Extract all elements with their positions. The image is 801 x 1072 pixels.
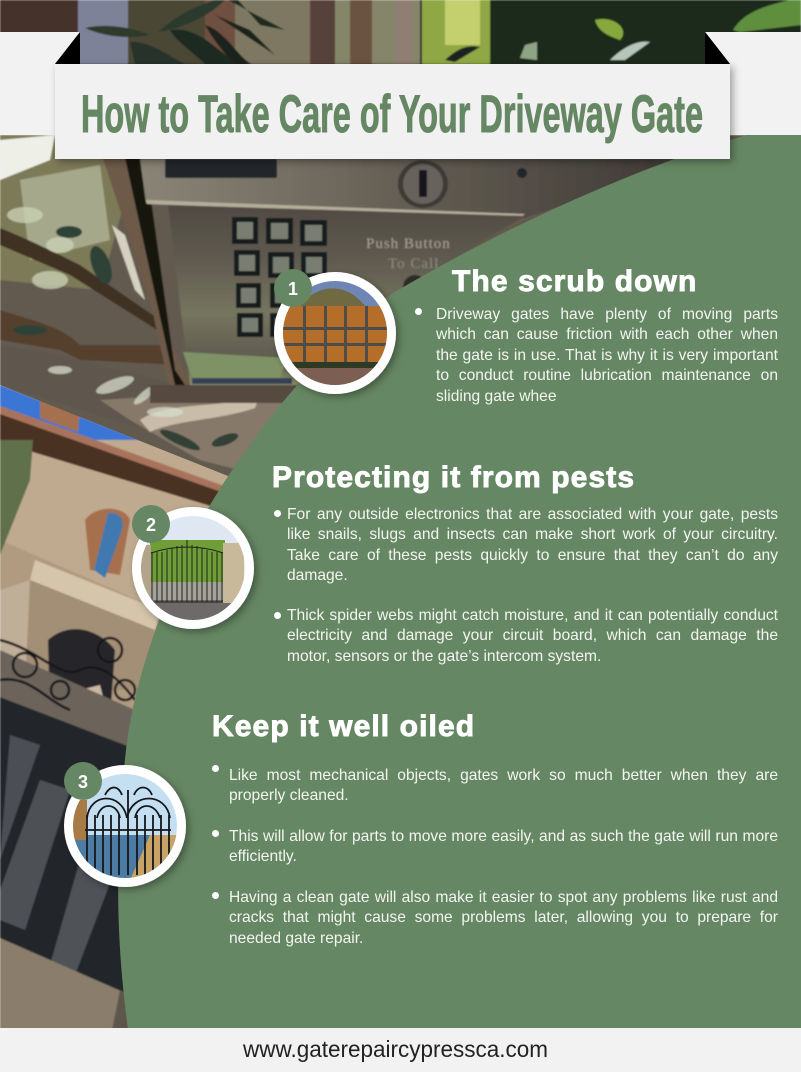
- heading: keep it well oiled: Keep it well oiled: [212, 710, 475, 743]
- text: oiled paragraph 1: Like most mechanical objects, gates work so much better when they are: [229, 767, 778, 784]
- image circle 1: wooden gate: [274, 272, 396, 394]
- bullet: [212, 892, 219, 899]
- green panel: [118, 135, 801, 1030]
- footer url: www.gaterepaircypressca.com: [242, 1036, 548, 1062]
- bullet: [212, 765, 219, 772]
- photo: villa and wrought-iron gate: [0, 385, 230, 1035]
- text: pests paragraph 1: [287, 506, 778, 584]
- text: pests paragraph 1: For any outside electronics that are associated with your gate, pests: [287, 506, 778, 523]
- text: oiled paragraph 3: needed gate repair.: [229, 930, 363, 947]
- text: pests paragraph 2: [287, 607, 778, 665]
- ribbon fold left: [55, 32, 80, 64]
- text: scrub down: the gate is in use. That is why it is very important: [436, 347, 778, 364]
- photo: top foliage: [0, 0, 801, 70]
- badge 1: 1: [288, 279, 298, 299]
- text: oiled paragraph 3: cracks that might cause some problems later, allowing you to prepare for: [229, 909, 778, 926]
- text: oiled paragraph 2: This will allow for parts to move more easily, and as such the gate will run more: [229, 828, 778, 845]
- text: oiled paragraph 3: Having a clean gate will also make it easier to spot any problems like rust and: [229, 889, 778, 906]
- image circle 2: iron driveway gate: [132, 507, 254, 629]
- heading: protecting it from pests: Protecting it from pests: [272, 461, 635, 494]
- text: pests paragraph 2: motor, sensors or the gate’s intercom system.: [287, 648, 601, 665]
- text: oiled paragraph 1: [229, 767, 778, 804]
- bullet: [274, 612, 281, 619]
- bullet: [212, 830, 219, 837]
- bullet: [274, 510, 281, 517]
- text: pests paragraph 2: electricity and damage your circuit board, which can damage the: [287, 627, 778, 644]
- text: oiled paragraph 3: [229, 889, 778, 947]
- top band left: [0, 32, 80, 135]
- text: scrub down: Driveway gates have plenty of moving parts: [436, 306, 778, 323]
- footer band: [0, 1028, 801, 1072]
- text: pests paragraph 2: Thick spider webs might catch moisture, and it can potentially conduct: [287, 607, 778, 624]
- image circle 3: ornate iron gate: [64, 765, 186, 887]
- photo: olive tree and intercom keypad: [0, 135, 801, 480]
- text: pests paragraph 1: Take care of these pests quickly to ensure that they can’t do any: [287, 547, 778, 564]
- badge 3: [64, 762, 102, 800]
- badge 3: 3: [78, 772, 88, 792]
- text: scrub down: sliding gate whee: [436, 388, 557, 405]
- text: scrub down: which can cause friction with each other when: [436, 326, 778, 343]
- badge 2: 2: [146, 515, 156, 535]
- photo: olive tree and intercom keypad: To Call: [388, 256, 439, 272]
- heading: the scrub down: The scrub down: [452, 265, 697, 298]
- title banner: [55, 64, 730, 159]
- badge 2: [132, 505, 170, 543]
- intercom face: [140, 159, 700, 218]
- bullet: [415, 308, 422, 315]
- text: pests paragraph 1: damage.: [287, 567, 348, 584]
- badge 1: [274, 269, 312, 307]
- text: oiled paragraph 2: efficiently.: [229, 848, 297, 865]
- text: scrub down: to conduct routine lubrication maintenance on: [436, 367, 778, 384]
- photo: olive tree and intercom keypad: Push Button: [366, 236, 451, 252]
- top band right: [705, 32, 801, 135]
- text: pests paragraph 1: like snails, slugs and insects can make short work of your circuitry.: [287, 526, 778, 543]
- text: oiled paragraph 2: [229, 828, 778, 865]
- text: scrub down: [436, 306, 778, 405]
- text: oiled paragraph 1: properly cleaned.: [229, 787, 349, 804]
- ribbon fold right: [705, 32, 730, 64]
